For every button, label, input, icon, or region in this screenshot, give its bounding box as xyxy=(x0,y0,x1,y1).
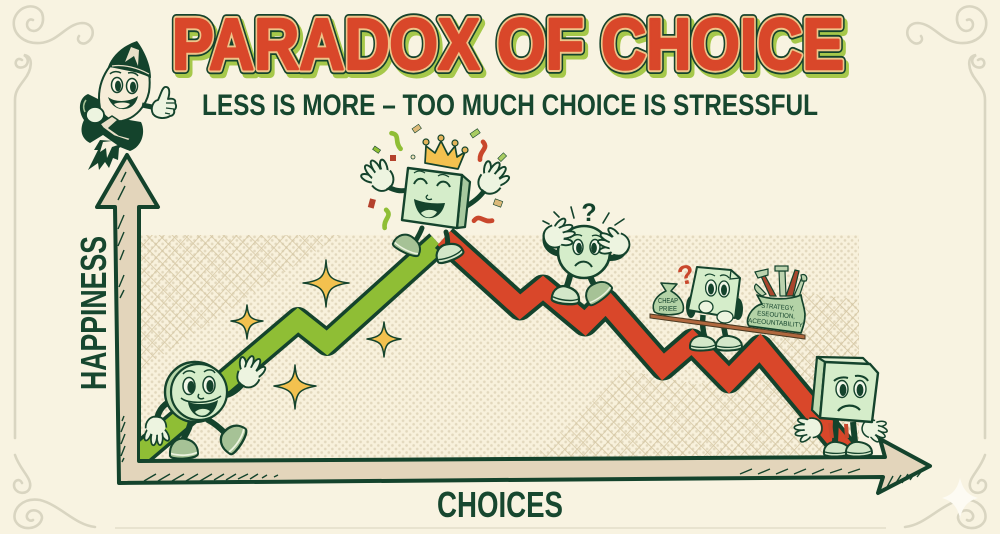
chart backdrop: halftone panel xyxy=(140,235,859,460)
title: PARADOX OF CHOICE xyxy=(172,5,844,85)
rocket face xyxy=(112,78,122,92)
title: PARADOX OF CHOICE xyxy=(175,9,847,89)
confetti xyxy=(368,124,507,229)
tool bag: strategy, execution, accountability: ACEOUNTABILITY xyxy=(748,318,804,329)
thinking hand xyxy=(699,301,713,313)
money bag: cheap price: PRIEE xyxy=(659,306,677,313)
character: document weighing options on a scale xyxy=(650,259,807,351)
x axis label: CHOICES xyxy=(437,484,563,525)
rocket body xyxy=(99,66,150,121)
character: rocket mascot giving thumbs up xyxy=(80,41,176,170)
sparkle stars xyxy=(231,260,401,409)
sparkle: bottom right xyxy=(942,478,978,518)
y axis label: HAPPINESS xyxy=(73,236,114,390)
balance plank xyxy=(650,314,805,339)
corner flourish: bottom right xyxy=(905,455,986,528)
rocket fist xyxy=(86,107,104,123)
corner flourish: top left xyxy=(14,6,93,438)
tool bag: strategy, execution, accountability xyxy=(747,266,807,333)
question mark: ? xyxy=(581,199,597,227)
character: happy coin climbing xyxy=(142,351,270,459)
character: joyful cube with crown xyxy=(356,124,515,265)
character: sad cube at the bottom xyxy=(792,357,891,457)
red falling line xyxy=(444,238,845,450)
tool bag: strategy, execution, accountability: STRATEGY, xyxy=(761,303,795,312)
stress rays xyxy=(543,207,624,225)
rocket arm xyxy=(142,105,152,107)
corner flourish: top right xyxy=(907,6,986,438)
rocket flame xyxy=(88,140,128,170)
tool bag: strategy, execution, accountability: ESEOUTION, xyxy=(757,310,795,321)
crown xyxy=(425,141,465,169)
title: PARADOX OF CHOICE xyxy=(172,5,844,85)
rocket cone xyxy=(108,41,151,78)
money bag: cheap price: CHEAP xyxy=(658,298,678,305)
corner flourish: bottom left xyxy=(14,455,95,528)
red question mark: ? xyxy=(675,259,697,291)
axes arrow xyxy=(97,155,930,493)
money bag: cheap price xyxy=(653,283,683,315)
subtitle: LESS IS MORE – TOO MUCH CHOICE IS STRESSFUL xyxy=(202,89,818,122)
thumbs up hand xyxy=(152,87,176,118)
rocket coat and fins xyxy=(80,94,143,151)
frame line: bottom xyxy=(115,527,886,529)
green rising line xyxy=(132,243,438,461)
character: worried ball xyxy=(539,199,634,307)
title: PARADOX OF CHOICE xyxy=(172,5,844,85)
rocket nozzle xyxy=(100,116,130,141)
